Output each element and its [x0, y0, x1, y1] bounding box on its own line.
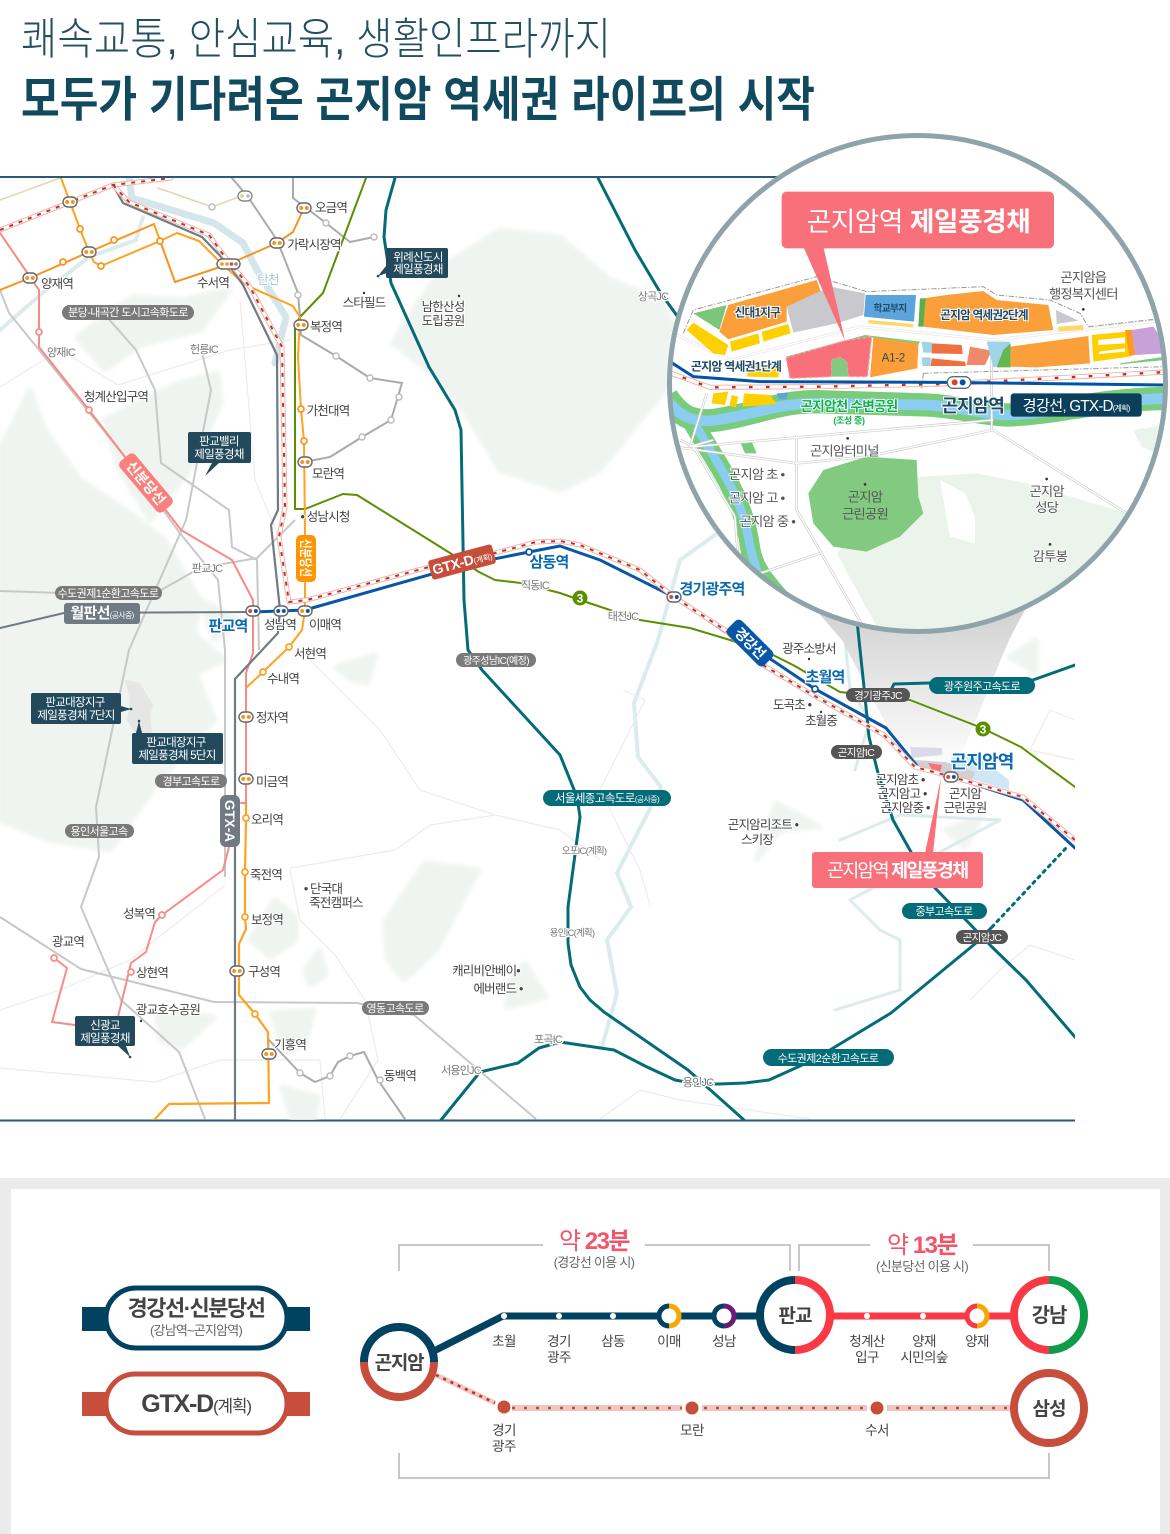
station and place labels: 서현역	[294, 647, 326, 661]
station and place labels: 광주소방서	[782, 642, 836, 656]
road tags: 광주원주고속도로	[944, 680, 1021, 693]
title line 1: 쾌속교통, 안심교육, 생활인프라까지	[21, 15, 611, 64]
hillside	[837, 473, 1127, 633]
station and place labels: 보정역	[251, 913, 283, 927]
site labels: 곤지암 초 •	[729, 467, 786, 482]
forest areas	[0, 230, 1036, 1119]
station and place labels: 도곡초 •	[773, 698, 812, 712]
callout: 판교대장지구 7단지	[31, 693, 132, 724]
blob 판교대장	[125, 680, 153, 733]
station and place labels: 오리역	[251, 813, 283, 827]
route station labels: 입구	[855, 1350, 879, 1365]
station and place labels: 곤지암	[949, 787, 982, 801]
callout: 위례신도시 제일풍경채: 제일풍경채	[393, 262, 443, 276]
legend: GTX-D: GTX-D(계획)	[141, 1390, 251, 1418]
subway grey lines	[0, 178, 405, 1119]
route station labels: 경기	[547, 1334, 571, 1349]
callout: 판교대장지구 7단지: 제일풍경채 7단지	[37, 708, 115, 722]
line tag: 월판선: 월판선(공사중)	[70, 605, 135, 622]
route line: 경강선	[432, 1306, 760, 1352]
callout: 신광교 제일풍경채: 신광교	[90, 1019, 120, 1032]
station and place labels: 복정역	[310, 320, 342, 334]
site labels: 곤지암 역세권2단계	[940, 308, 1028, 322]
callout: 신광교 제일풍경채	[75, 1016, 135, 1058]
station and place labels: 성남역	[264, 618, 296, 632]
travel time: 약 13분: 약 13분	[887, 1232, 958, 1259]
line 3 badges	[572, 590, 990, 736]
northern block 신대1지구	[687, 280, 865, 355]
road tags: 용인서울고속	[70, 825, 128, 838]
orange lines	[0, 178, 305, 1120]
station and place labels: 이매역	[309, 618, 341, 632]
callout: 판교대장지구 7단지: 판교대장지구	[45, 696, 105, 709]
road tags: 곤지암IC	[838, 747, 875, 759]
road tags: 중부고속도로	[915, 905, 973, 918]
travel time: 약 23분: (경강선 이용 시)	[554, 1255, 635, 1270]
callout: 곤지암역 제일풍경채	[812, 778, 983, 888]
eastern blocks	[922, 327, 1165, 367]
road tags: 수도권제2순환고속도로	[778, 1052, 879, 1065]
callout: 판교밸리 제일풍경채: 제일풍경채	[194, 447, 244, 461]
station and place labels: 곤지암초 •	[875, 773, 925, 787]
road tags: 수도권제1순환고속도로	[58, 587, 159, 600]
housing south of rail	[712, 365, 788, 407]
IC labels: 용인IC(계획)	[550, 927, 595, 939]
station and place labels: 기흥역	[274, 1038, 306, 1052]
callout: 판교밸리 제일풍경채: 판교밸리	[199, 435, 239, 448]
line tag: 신분당선 rotated: 신분당선	[123, 458, 169, 508]
IC labels: 판교JC	[192, 562, 223, 575]
line tag: 경강선: 경강선	[731, 624, 769, 662]
station and place labels: 탄천	[257, 272, 279, 287]
station and place labels: 도립공원	[422, 314, 465, 328]
station and place labels: 광교호수공원	[136, 1003, 200, 1017]
GTX-A line	[114, 187, 280, 1120]
IC labels	[47, 290, 714, 1089]
station and place labels: 곤지암역	[950, 752, 1014, 772]
IC labels: 서용인JC	[441, 1064, 482, 1077]
transfer: 양재	[967, 1306, 987, 1326]
station and place labels: 동백역	[384, 1069, 416, 1083]
bottom panel background	[0, 1178, 1170, 1534]
block 역세권 2단계	[918, 291, 1083, 335]
site cluster near 곤지암역	[910, 747, 1009, 790]
project site 곤지암역 제일풍경채	[786, 337, 872, 378]
station and place labels	[41, 201, 1014, 1083]
site labels: 곤지암 역세권1단계	[691, 360, 782, 374]
boundary dash lines	[683, 277, 1163, 390]
route station labels: 시민의숲	[900, 1350, 948, 1365]
road tags	[55, 305, 1035, 1066]
zoom cone	[819, 610, 1025, 742]
station: 곤지암역	[947, 377, 971, 388]
terminal: 삼성	[1014, 1373, 1084, 1443]
station and place labels: 경기광주역	[679, 581, 745, 598]
site labels: 신대1지구	[735, 306, 781, 320]
callout: 곤지암역 제일풍경채 large: 곤지암역 제일풍경채	[807, 207, 1031, 237]
station and place labels: 곤지암리조트 •	[728, 818, 799, 832]
site labels: 곤지암터미널	[810, 444, 879, 459]
terminal: 판교: 판교	[779, 1305, 812, 1327]
station and place labels: 스키장	[741, 833, 774, 847]
school site	[864, 295, 916, 322]
road tags: 경기광주JC	[854, 689, 903, 702]
월판선 line	[0, 612, 253, 628]
title line 2: 모두가 기다려온 곤지암 역세권 라이프의 시작	[21, 74, 815, 127]
line tag: GTX-D: GTX-D(계획)	[431, 546, 494, 578]
station and place labels: 곤지암중 •	[880, 801, 930, 815]
station and place labels: 죽전역	[250, 868, 282, 882]
callout: 곤지암역 제일풍경채: 곤지암역 제일풍경채	[827, 860, 969, 881]
site labels: 학교부지	[874, 303, 906, 315]
site labels: 근린공원	[842, 506, 888, 521]
river and green banks	[667, 397, 1167, 610]
station and place labels: 초월중	[805, 714, 837, 728]
station and place labels: 죽전캠퍼스	[309, 896, 363, 910]
경강선 blue line	[253, 546, 1075, 848]
legend: 경강선·신분당선: (강남역~곤지암역)	[150, 1323, 242, 1338]
route station labels: 경기	[492, 1423, 516, 1438]
IC labels: 상곡JC	[638, 290, 669, 303]
IC labels: 직동IC	[521, 579, 550, 592]
IC labels: 헌릉IC	[190, 343, 219, 356]
site labels: 곤지암천 수변공원	[801, 399, 898, 414]
station and place labels: 광교역	[52, 935, 84, 949]
station and place labels: 근린공원	[944, 801, 987, 815]
route station labels: 초월	[492, 1334, 516, 1349]
IC labels: 양재IC	[47, 346, 76, 359]
tag: 경강선, GTX-D: 경강선, GTX-D(계획)	[1023, 398, 1131, 415]
station and place labels: 수서역	[197, 276, 229, 290]
station and place labels: 남한산성	[422, 300, 464, 314]
route station labels: 광주	[547, 1350, 571, 1365]
site labels: 곤지암읍	[1060, 270, 1107, 285]
line 3 badges: 3	[577, 592, 584, 606]
route line: GTX-D	[436, 1375, 1012, 1416]
station and place labels: 가천대역	[307, 403, 349, 418]
station and place labels: 가락시장역	[287, 238, 341, 252]
line 3 green	[295, 178, 1075, 787]
route line: 신분당선	[830, 1306, 1015, 1326]
GTX-D line	[0, 178, 1075, 840]
station and place labels: 캐리비안베이•	[452, 964, 520, 978]
site labels: (조성 중)	[833, 415, 865, 425]
site labels: 곤지암 중 •	[740, 514, 796, 529]
line tag: GTX-A: GTX-A	[222, 800, 237, 842]
road tags: 분당-내곡간 도시고속화도로	[68, 306, 188, 319]
station and place labels: 오금역	[315, 201, 347, 215]
rail lines	[667, 362, 1167, 387]
transfer: 성남	[714, 1306, 734, 1326]
station and place labels: 양재역	[41, 277, 73, 291]
callout: 위례신도시 제일풍경채: 위례신도시	[393, 251, 443, 264]
station and place labels: 정자역	[256, 711, 288, 725]
station and place labels: • 성남시청	[300, 510, 350, 524]
station and place labels: 청계산입구역	[84, 390, 148, 404]
IC labels: 용인JC	[683, 1076, 714, 1089]
route station labels: 수서	[865, 1423, 889, 1438]
road tags: 광주성남IC(예정)	[463, 655, 529, 667]
station and place labels: 상현역	[136, 966, 168, 980]
road tags: 곤지암JC	[963, 932, 1002, 944]
travel time: 약 23분: 약 23분	[559, 1228, 630, 1255]
line tag: 신분당선 orange: 신분당선	[298, 539, 313, 577]
roads	[673, 320, 1167, 627]
expressways grey	[0, 290, 536, 1119]
route station labels: 양재	[965, 1334, 989, 1349]
site labels: 성당	[1035, 500, 1059, 515]
callout: 신광교 제일풍경채: 제일풍경채	[80, 1031, 130, 1045]
pink line 신분당선	[0, 233, 253, 1025]
terminal: 삼성: 삼성	[1033, 1398, 1065, 1420]
line tag: 신분당선 orange	[296, 535, 316, 582]
station and place labels: 구성역	[248, 965, 280, 979]
travel time: 약 13분	[876, 1232, 968, 1274]
route brackets	[399, 1245, 1049, 1478]
route station labels: 성남	[712, 1334, 736, 1349]
station and place labels: 초월역	[805, 669, 845, 686]
legend: 경강선·신분당선: 경강선·신분당선	[127, 1296, 265, 1321]
station and place labels: 스타필드	[343, 296, 386, 310]
road tags: 영동고속도로	[366, 1002, 424, 1015]
callout: 위례신도시 제일풍경채	[377, 248, 448, 278]
legend: GTX-D	[82, 1374, 310, 1433]
IC labels: 태전JC	[608, 610, 639, 623]
route station labels: 이매	[657, 1334, 681, 1349]
site labels: 곤지암	[1029, 484, 1064, 499]
terminal: 강남: 강남	[1032, 1304, 1067, 1327]
station and place labels: 성복역	[123, 907, 155, 921]
title	[21, 15, 815, 127]
route station labels	[492, 1334, 989, 1454]
travel time: 약 13분: (신분당선 이용 시)	[876, 1259, 968, 1274]
stations	[23, 191, 958, 1059]
line tag: GTX-A	[220, 795, 240, 847]
A1-2 block	[870, 337, 918, 377]
station and place labels: 미금역	[256, 775, 288, 789]
site labels: 곤지암	[848, 490, 883, 505]
road tags: 서울세종고속도로(공사중)	[555, 792, 660, 805]
minor roads	[0, 300, 1075, 1119]
line tag: 신분당선 rotated	[117, 451, 175, 515]
site labels: A1-2	[882, 352, 905, 365]
magnified site circle	[667, 135, 1167, 633]
transfer: 이매	[659, 1306, 679, 1326]
route station labels: 청계산	[849, 1334, 885, 1349]
site labels: 행정복지센터	[1049, 286, 1118, 301]
route station labels: 양재	[912, 1334, 936, 1349]
route station labels: 광주	[492, 1439, 516, 1454]
park green	[808, 457, 923, 552]
terminal: 판교	[760, 1280, 830, 1350]
callout: 판교대장지구 5단지: 제일풍경채 5단지	[138, 748, 216, 762]
station and place labels: 곤지암고 •	[877, 787, 927, 801]
line tag: GTX-D	[428, 544, 496, 580]
site green strips	[786, 335, 920, 357]
line tag: 월판선	[64, 603, 140, 624]
station and place labels: 삼동역	[529, 554, 569, 571]
legend: 경강선·신분당선	[82, 1288, 310, 1348]
callout: 판교밸리 제일풍경채	[188, 432, 251, 476]
station and place labels: 판교역	[208, 618, 248, 635]
route station labels: 삼동	[601, 1334, 625, 1349]
site labels: 감투봉	[1033, 549, 1068, 564]
highways teal	[384, 178, 1075, 1120]
station and place labels: • 단국대	[304, 882, 342, 896]
travel time: 약 23분	[554, 1228, 635, 1270]
terminal: 강남	[1014, 1280, 1084, 1350]
site labels: 곤지암역	[942, 396, 1004, 416]
IC labels: 오포IC(계획)	[562, 845, 607, 857]
station and place labels: 모란역	[312, 467, 344, 481]
callout: 곤지암역 제일풍경채 large	[782, 192, 1054, 341]
site labels	[691, 270, 1118, 564]
terminal: 곤지암: 곤지암	[375, 1352, 424, 1374]
callout: 판교대장지구 5단지	[132, 720, 223, 764]
route station labels: 모란	[680, 1423, 704, 1438]
terminal: 곤지암	[364, 1327, 434, 1397]
station and place labels: 에버랜드 •	[473, 982, 523, 996]
regional map	[0, 176, 1075, 1122]
site labels: 곤지암 고 •	[729, 491, 786, 506]
IC labels: 포곡IC	[534, 1034, 563, 1046]
tag: 경강선, GTX-D	[1011, 393, 1142, 417]
station and place labels: 수내역	[267, 672, 299, 686]
rivers	[0, 178, 1000, 1047]
line 3 badges: 3	[980, 722, 987, 736]
line tag: 경강선	[725, 618, 775, 668]
callout: 판교대장지구 5단지: 판교대장지구	[146, 736, 206, 749]
road tags: 경부고속도로	[162, 775, 220, 788]
